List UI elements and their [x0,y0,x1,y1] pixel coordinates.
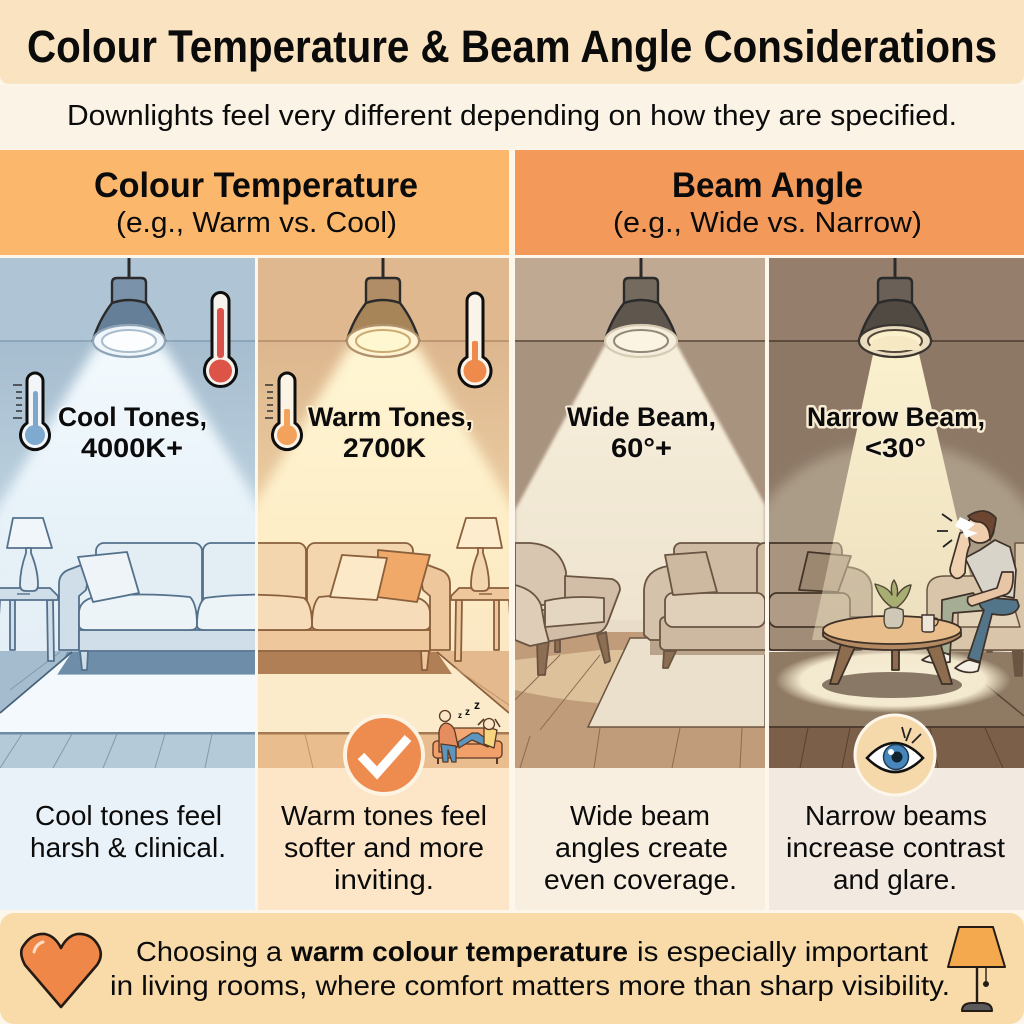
potted plant [875,580,911,628]
panel: cool tones scene [0,258,255,768]
title band [0,0,1024,84]
panel: warm tones scene [258,258,509,768]
floor [515,632,765,768]
callout text: in living rooms, where comfort matters more than sharp visibility. [110,970,950,1001]
pendant lamp [605,258,677,357]
label: narrow beam [807,402,985,463]
label: narrow beam: <30° [865,433,926,463]
icon: resting person on sofa [433,698,502,764]
icon: heart [21,934,101,1007]
subtitle [0,85,1024,149]
panel: wide beam scene [515,258,765,768]
column header: beam angle: Beam Angle [672,166,863,205]
icon: table lamp [948,927,1005,1011]
cushion [78,552,139,602]
caption: wide beam [515,768,765,910]
floor [769,652,1024,768]
column header: colour temperature: (e.g., Warm vs. Cool) [116,207,397,239]
sleep letters: z [474,698,480,712]
pendant lamp [859,258,931,357]
sofa [643,542,765,669]
caption: narrow beam [769,768,1024,910]
caption: narrow beam: and glare. [833,864,957,895]
column header: colour temperature: Colour Temperature [94,166,418,205]
label: wide beam: 60°+ [611,433,672,463]
column header: beam angle: (e.g., Wide vs. Narrow) [613,207,922,239]
sofa and side table [0,517,255,671]
armchair [515,543,620,675]
caption: narrow beam: increase contrast [786,832,1005,863]
table shadow [822,672,962,698]
rug [258,652,509,733]
armchair [927,543,1024,676]
callout text: Choosing a [136,936,282,967]
wall halo [769,444,1024,652]
caption: warm tones [258,768,509,910]
icon: eye badge [855,715,935,795]
label: warm tones: Warm Tones, [308,402,473,432]
sleep letters: z [458,711,462,720]
label: warm tones [306,406,474,458]
caption: warm tones: Warm tones feel [281,800,487,831]
pendant lamp [347,258,419,357]
pendant lamp [93,258,165,357]
caption: warm tones: softer and more [284,832,484,863]
column header: colour temperature [0,150,509,255]
cushion: orange [377,550,430,602]
mug [922,615,938,632]
caption: narrow beam: Narrow beams [805,800,987,831]
thermometer: warm tall [459,293,491,387]
label: warm tones: 2700K [343,433,427,463]
light beam [258,340,509,636]
label: narrow beam: Narrow Beam, [807,402,985,432]
caption: cool tones: harsh & clinical. [30,832,226,863]
thermometer: hot [204,292,237,387]
light beam [833,354,970,616]
label: wide beam [565,406,714,458]
label: cool tones: Cool Tones, [58,402,207,432]
callout text: warm colour temperature [290,936,628,967]
callout text: is especially important [637,936,928,967]
sleep letters [458,698,480,720]
label: wide beam: Wide Beam, [567,402,716,432]
floor [0,651,255,712]
label: cool tones: 4000K+ [81,433,183,463]
coffee table [823,616,961,684]
callout banner [0,913,1024,1024]
light beam [515,345,765,625]
rug [588,638,765,727]
glare strokes [937,514,952,547]
caption: wide beam: angles create [555,832,728,863]
thermometer: cool [13,373,49,450]
seated person shielding eyes [922,511,1019,672]
rug [0,652,255,733]
caption: cool tones: Cool tones feel [35,800,222,831]
light beam [0,340,255,632]
label: cool tones [57,406,207,458]
sofa [769,543,872,668]
cushion: cream [330,555,387,600]
panel: narrow beam scene [745,258,1024,768]
column header: beam angle [515,150,1024,255]
beam over sofa [812,540,970,640]
thermometer: warm small [265,373,301,450]
cushion [665,552,717,595]
callout text [110,936,950,1001]
caption: wide beam: even coverage. [544,864,737,895]
sofa and side table [258,517,509,671]
caption: warm tones: inviting. [334,864,434,895]
floor [258,651,509,712]
white separators [256,258,767,768]
caption: cool tones [0,768,255,910]
icon: check badge [345,716,423,794]
pool of light on floor [515,650,624,703]
caption: wide beam: Wide beam [570,800,710,831]
sleep letters: z [465,707,470,718]
floor pool of light [775,647,1011,713]
subtitle: Downlights feel very different depending on how they are specified. [67,100,957,132]
